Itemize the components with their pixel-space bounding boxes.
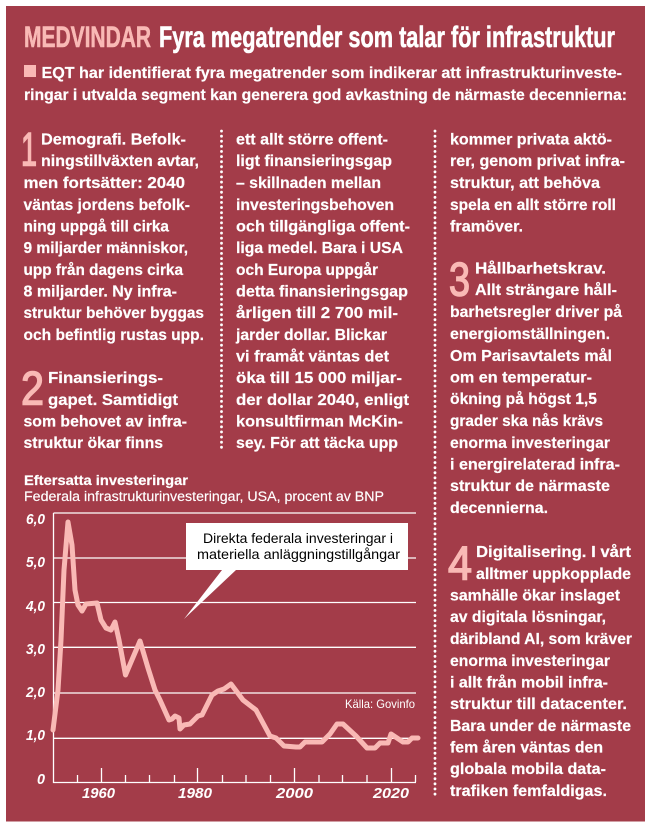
text block: 4 Digitalisering: alltmer uppkopplade <box>476 566 631 583</box>
text block: 4 Digitalisering: fem åren väntas den <box>450 740 603 756</box>
text block: 3 Hållbarhetskrav: enorma investeringar <box>450 435 610 452</box>
text block: 2 Finansieringsgapet: vi framåt väntas det <box>236 348 389 366</box>
x axis labels: 2000 <box>275 785 314 802</box>
chart heading: Federala infrastrukturinvesteringar, USA, procent av BNP <box>24 489 384 504</box>
numeral 1: 1 <box>21 122 37 176</box>
text block: 4 Digitalisering: i allt från mobil infra- <box>450 674 608 692</box>
x axis labels: 1960 <box>82 785 116 802</box>
text block: 2 Finansieringsgapet: som behovet av infra- <box>24 414 187 430</box>
y axis labels: 0 <box>37 771 46 788</box>
text block: 2 Finansieringsgapet: spela en allt större roll <box>450 197 616 214</box>
data line <box>53 522 418 748</box>
text block: 4 Digitalisering: Digitalisering. I vårt <box>476 544 631 561</box>
text block: 3 Hållbarhetskrav: Om Parisavtalets mål <box>450 348 612 365</box>
chart heading <box>24 473 384 504</box>
text block: 2 Finansieringsgapet: investeringsbehoven <box>236 197 394 214</box>
text block: 3 Hållbarhetskrav: ökning på högst 1,5 <box>450 391 597 408</box>
text block: 2 Finansieringsgapet: ligt finansieringsgap <box>236 153 392 170</box>
callout <box>184 523 408 619</box>
text block: 2 Finansieringsgapet: jarder dollar. Blickar <box>235 327 387 344</box>
text block: 2 Finansieringsgapet: ett allt större offent- <box>236 132 388 148</box>
text block: 2 Finansieringsgapet: detta finansieringsgap <box>236 284 408 300</box>
text block: 1 Demografi: struktur behöver byggas <box>24 305 204 322</box>
y axis labels: 5,0 <box>26 554 46 571</box>
text block: 2 Finansieringsgapet: och Europa uppgår <box>236 262 378 279</box>
text block: 4 Digitalisering: däribland AI, som kräver <box>450 631 632 648</box>
text block: 4 Digitalisering: enorma investeringar <box>450 653 610 670</box>
text block: 3 Hållbarhetskrav <box>449 252 622 517</box>
y axis labels: 4,0 <box>25 598 46 615</box>
text block: 4 Digitalisering: samhälle ökar inslaget <box>450 588 620 604</box>
text block: 3 Hållbarhetskrav: struktur de närmaste <box>450 478 610 495</box>
text block: 2 Finansieringsgapet <box>21 132 625 452</box>
text block: 2 Finansieringsgapet: framöver. <box>450 218 523 236</box>
text block: 2 Finansieringsgapet: sey. För att täcka upp <box>236 435 398 452</box>
text block: 2 Finansieringsgapet: gapet. Samtidigt <box>48 392 178 409</box>
y axis labels: 6,0 <box>26 511 46 528</box>
text block: 2 Finansieringsgapet: och tillgängliga offent- <box>236 218 410 236</box>
text block: 4 Digitalisering <box>448 536 632 800</box>
source note: Källa: Govinfo <box>345 697 415 711</box>
callout: materiella anläggningstillgångar <box>197 546 400 562</box>
text block: 2 Finansieringsgapet: konsultfirman McKin- <box>236 414 403 430</box>
text block: 1 Demografi: 8 miljarder. Ny infra- <box>24 284 177 300</box>
y axis labels: 2,0 <box>25 684 46 701</box>
title: MEDVINDAR <box>24 21 151 54</box>
text block: 1 Demografi: ning uppgå till cirka <box>24 218 169 236</box>
text block: 2 Finansieringsgapet: liga medel. Bara i USA <box>236 240 403 257</box>
text block: 1 Demografi: och befintlig rustas upp. <box>24 327 204 344</box>
numeral 4: 4 <box>448 536 472 590</box>
text block: 4 Digitalisering: av digitala lösningar, <box>450 609 606 626</box>
column dividers <box>222 131 435 797</box>
text block: 1 Demografi: ningstillväxten avtar, <box>41 153 199 170</box>
x axis labels: 1980 <box>178 785 213 802</box>
chart axes and grid <box>54 513 416 782</box>
intro text <box>24 65 627 104</box>
text block: 2 Finansieringsgapet: öka till 15 000 miljar- <box>236 370 402 387</box>
chart heading: Eftersatta investeringar <box>24 473 189 488</box>
intro text: ringar i utvalda segment kan generera god avkastning de närmaste decennierna: <box>24 87 627 104</box>
y axis labels: 1,0 <box>26 727 46 744</box>
text block: 4 Digitalisering: trafiken femfaldigas. <box>450 783 607 800</box>
text block: 3 Hållbarhetskrav: Allt strängare håll- <box>475 282 617 299</box>
text block: 3 Hållbarhetskrav: om en temperatur- <box>450 370 592 386</box>
text block: 3 Hållbarhetskrav: energiomställningen. <box>450 326 610 343</box>
text block: 1 Demografi: 9 miljarder människor, <box>24 240 188 257</box>
text block: 2 Finansieringsgapet: struktur, att behöva <box>450 175 600 192</box>
text block: 1 Demografi: upp från dagens cirka <box>24 262 183 279</box>
text block: 2 Finansieringsgapet: rer, genom privat infra- <box>450 153 625 170</box>
y axis labels <box>25 511 46 788</box>
text block: 1 Demografi <box>21 122 204 344</box>
text block: 4 Digitalisering: struktur till datacenter. <box>450 696 627 713</box>
text block: 3 Hållbarhetskrav: Hållbarhetskrav. <box>475 260 606 278</box>
text block: 4 Digitalisering: Bara under de närmaste <box>450 718 631 735</box>
text block: 3 Hållbarhetskrav: decennierna. <box>450 500 548 517</box>
line chart <box>25 511 418 802</box>
numeral 2: 2 <box>21 362 44 414</box>
text block: 2 Finansieringsgapet: struktur ökar finns <box>24 435 163 452</box>
text block: 1 Demografi: väntas jordens befolk- <box>24 197 190 214</box>
text block: 4 Digitalisering: globala mobila data- <box>450 761 606 778</box>
text block: 2 Finansieringsgapet: der dollar 2040, enligt <box>236 392 409 409</box>
text block: 3 Hållbarhetskrav: i energirelaterad infra- <box>450 456 620 474</box>
intro text: EQT har identifierat fyra megatrender som indikerar att infrastrukturinveste- <box>42 65 622 82</box>
numeral 3: 3 <box>449 252 470 306</box>
text block: 2 Finansieringsgapet: årligen till 2 700 mil- <box>236 305 398 322</box>
x axis labels <box>82 785 410 802</box>
text block: 3 Hållbarhetskrav: barhetsregler driver på <box>450 304 622 321</box>
text block: 2 Finansieringsgapet: kommer privata aktö- <box>450 132 612 148</box>
callout: Direkta federala investeringar i <box>203 530 393 546</box>
text block: 2 Finansieringsgapet: – skillnaden mellan <box>236 175 381 192</box>
text block: 1 Demografi: men fortsätter: 2040 <box>24 175 185 192</box>
text block: 1 Demografi: Demografi. Befolk- <box>41 132 186 148</box>
text block: 2 Finansieringsgapet: Finansierings- <box>48 370 163 387</box>
text block: 3 Hållbarhetskrav: grader ska nås krävs <box>450 413 603 430</box>
x axis labels: 2020 <box>372 785 410 802</box>
y axis labels: 3,0 <box>26 641 46 658</box>
